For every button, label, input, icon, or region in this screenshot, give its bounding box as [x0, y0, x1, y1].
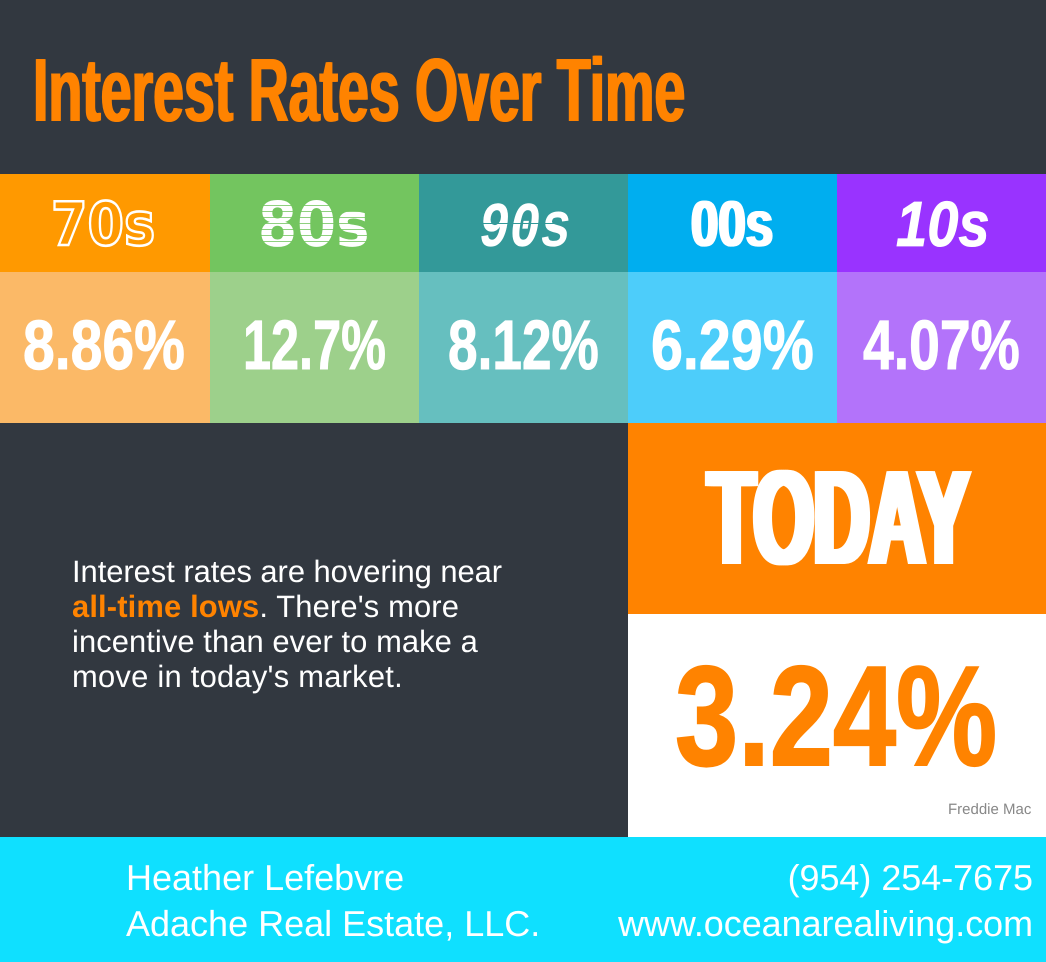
panel: 1970s [0, 174, 210, 423]
decade label: 90s: 90s [479, 194, 571, 266]
rate: 4.07%: 4.07% [863, 306, 1020, 384]
rate: 12.7%: 12.7% [243, 306, 386, 384]
rate: 6.29%: 6.29% [651, 306, 814, 384]
text block: explanation [72, 554, 502, 694]
panel: 2010s [837, 174, 1046, 423]
rate: 8.86%: 8.86% [23, 306, 185, 384]
panel: 1990s [419, 174, 628, 423]
decade label: 80s: 80s [258, 188, 369, 261]
text block: explanation: all-time lows. There's more [72, 589, 459, 624]
agency name: Adache Real Estate, LLC. [126, 903, 540, 944]
title: Interest Rates Over Time [33, 41, 685, 141]
panel: today rate [628, 614, 1046, 837]
decade label: 00s: 00s [691, 186, 773, 260]
decade label: 70s: 70s [51, 190, 155, 260]
panel: 2000s [628, 174, 837, 423]
text block: explanation: incentive than ever to make a [72, 624, 478, 659]
decade label: 10s: 10s [896, 188, 990, 260]
text block: explanation: Interest rates are hovering near [72, 554, 502, 589]
phone number: (954) 254-7675 [788, 858, 1033, 898]
panel: 1980s [210, 174, 419, 423]
footer: contact bar [0, 837, 1046, 962]
rate: 3.24%: 3.24% [675, 637, 997, 796]
source: Freddie Mac: Freddie Mac [948, 801, 1031, 818]
heading: TODAY: TODAY [708, 442, 969, 593]
rate: 8.12%: 8.12% [448, 306, 599, 384]
agent name: Heather Lefebvre [126, 857, 404, 898]
text block: explanation: move in today's market. [72, 659, 403, 694]
website: www.oceanarealiving.com [618, 904, 1033, 944]
panel: today heading [628, 423, 1046, 614]
